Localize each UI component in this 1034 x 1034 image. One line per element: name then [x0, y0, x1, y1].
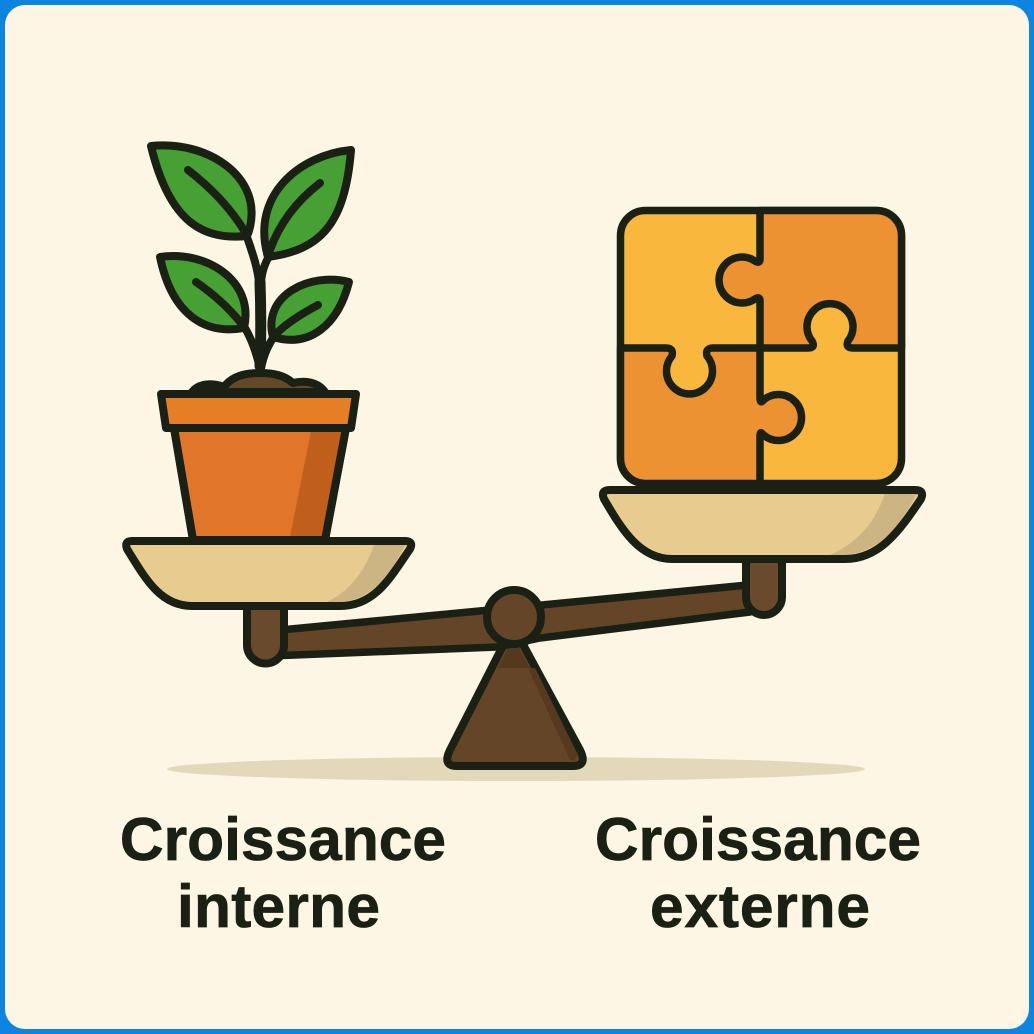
right pan — [603, 490, 922, 559]
icon: potted plant — [151, 145, 356, 540]
ground shadow — [167, 757, 865, 781]
leaf: top left — [151, 145, 252, 237]
label: Croissance interne — [120, 805, 446, 940]
puzzle piece: top right — [719, 210, 902, 348]
fulcrum triangle — [447, 626, 583, 766]
icon: balance scale — [247, 555, 782, 766]
stems — [245, 237, 273, 368]
label: Croissance interne: interne — [177, 872, 380, 940]
pivot — [487, 590, 541, 644]
label: Croissance externe — [595, 805, 921, 940]
leaf: lower right — [271, 280, 349, 340]
right hanger — [746, 555, 782, 615]
beam — [270, 585, 750, 656]
label: Croissance externe: externe — [650, 872, 870, 940]
icon: jigsaw puzzle — [620, 210, 902, 484]
label: Croissance externe: Croissance — [595, 805, 921, 873]
pot body — [174, 428, 346, 540]
pot rim — [161, 394, 356, 428]
leaf: lower left — [160, 256, 246, 329]
label: Croissance interne: Croissance — [120, 805, 446, 873]
left hanger — [247, 600, 284, 664]
left pan — [126, 541, 411, 606]
puzzle pieces: yellow base — [620, 210, 902, 484]
puzzle piece: bottom left — [620, 348, 802, 484]
soil — [192, 373, 325, 392]
leaf: top right — [264, 150, 351, 257]
